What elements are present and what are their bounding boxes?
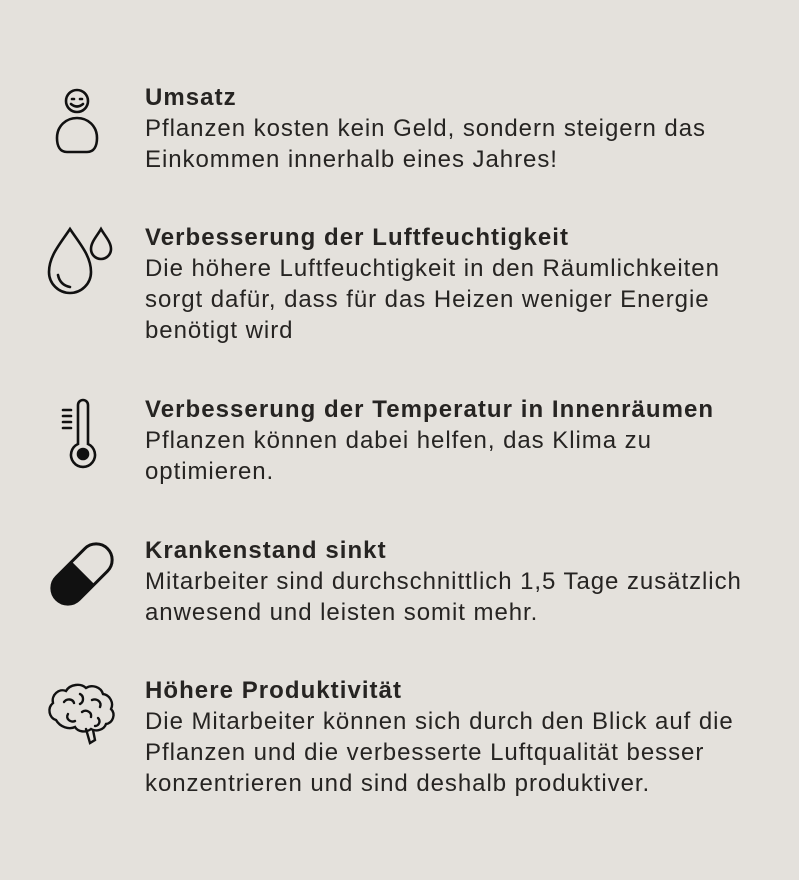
text: Krankenstand: anwesend und leisten somit mehr.: [145, 599, 538, 626]
text: Luftfeuchtigkeit: Die höhere Luftfeuchtigkeit in den Räumlichkeiten: [145, 255, 720, 282]
text: Temperatur: [145, 396, 714, 485]
text: Umsatz: Einkommen innerhalb eines Jahres!: [145, 146, 558, 173]
text: Produktivität: konzentrieren und sind deshalb produktiver.: [145, 770, 650, 797]
icon: person: [56, 88, 98, 154]
text: Luftfeuchtigkeit: Verbesserung der Luftfeuchtigkeit: [145, 224, 569, 251]
text: Umsatz: Pflanzen kosten kein Geld, sondern steigern das: [145, 115, 706, 142]
text: Temperatur: Verbesserung der Temperatur in Innenräumen: [145, 396, 714, 423]
text: Temperatur: Pflanzen können dabei helfen, das Klima zu: [145, 427, 652, 454]
text: Umsatz: Umsatz: [145, 84, 237, 111]
text: Temperatur: optimieren.: [145, 458, 274, 485]
text: Krankenstand: Mitarbeiter sind durchschnittlich 1,5 Tage zusätzlich: [145, 568, 742, 595]
text: Krankenstand: Krankenstand sinkt: [145, 537, 387, 564]
icon: thermometer: [62, 398, 96, 468]
text: Umsatz: [145, 84, 706, 173]
text: Produktivität: Die Mitarbeiter können sich durch den Blick auf die: [145, 708, 734, 735]
text: Produktivität: Höhere Produktivität: [145, 677, 402, 704]
icon: pill: [50, 542, 114, 606]
text: Luftfeuchtigkeit: [145, 224, 720, 344]
icon: water drops: [48, 226, 112, 294]
text: Luftfeuchtigkeit: sorgt dafür, dass für das Heizen weniger Energie: [145, 286, 710, 313]
text: Produktivität: Pflanzen und die verbesserte Luftqualität besser: [145, 739, 704, 766]
text: Krankenstand: [145, 537, 742, 626]
icon: brain: [48, 684, 115, 745]
text: Luftfeuchtigkeit: benötigt wird: [145, 317, 293, 344]
text: Produktivität: [145, 677, 734, 797]
